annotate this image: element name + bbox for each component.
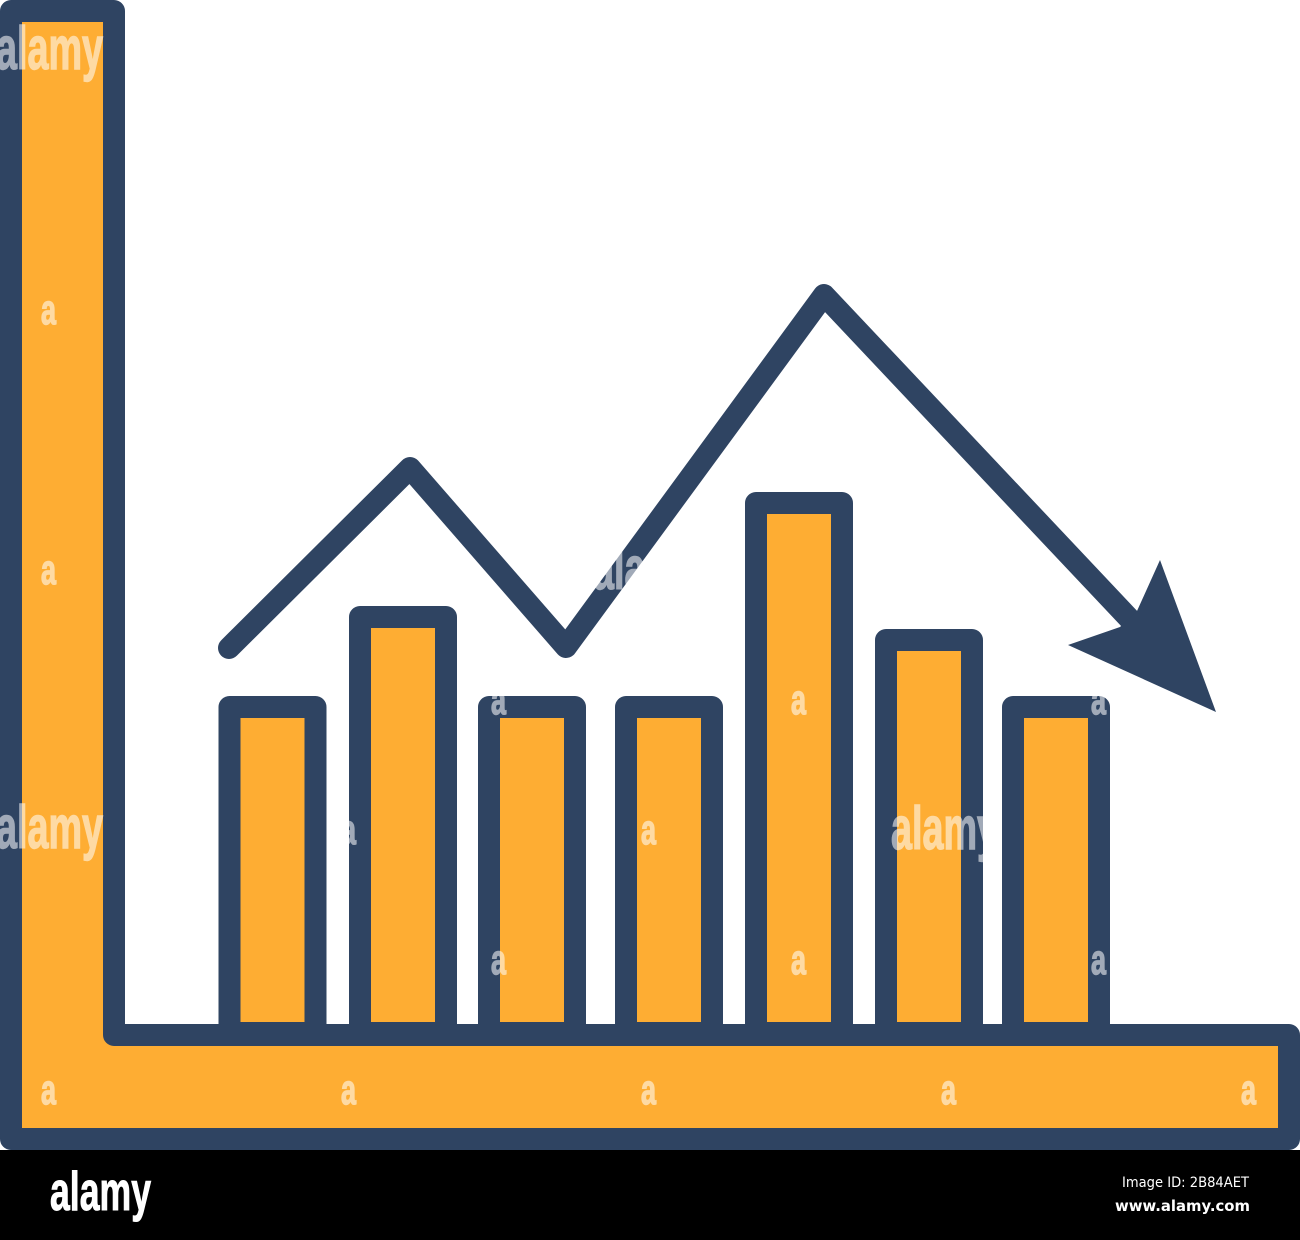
watermark fragments: a xyxy=(791,936,806,983)
watermark fragments: a xyxy=(941,1066,956,1113)
footer bar xyxy=(0,1150,1300,1240)
watermark fragments: a xyxy=(491,936,506,983)
watermark fragments: alamy xyxy=(593,535,700,602)
watermark fragments: alamy xyxy=(891,795,998,862)
bar 2 xyxy=(360,617,446,1033)
watermark fragments: a xyxy=(1091,936,1106,983)
watermark fragments: a xyxy=(791,676,806,723)
watermark fragments: a xyxy=(491,676,506,723)
watermark fragments: a xyxy=(1091,676,1106,723)
bar 3 xyxy=(489,707,575,1033)
url: www.alamy.com xyxy=(1115,1197,1250,1215)
trend line xyxy=(229,295,1140,648)
watermark fragments: alamy xyxy=(0,794,103,861)
watermark fragments: a xyxy=(41,546,56,593)
watermark fragments: a xyxy=(641,806,656,853)
watermark fragments: a xyxy=(341,1066,356,1113)
watermark fragments: alamy xyxy=(0,15,103,82)
bar 7 xyxy=(1013,707,1099,1033)
bar 5 xyxy=(756,503,842,1033)
watermark fragments: a xyxy=(41,1066,56,1113)
watermark fragments: a xyxy=(1241,1066,1256,1113)
watermark fragments: a xyxy=(41,286,56,333)
watermark fragments: a xyxy=(641,1066,656,1113)
watermark fragments: a xyxy=(341,806,356,853)
bar 4 xyxy=(626,707,712,1033)
alamy logo: alamy xyxy=(50,1160,151,1222)
bar 1 xyxy=(230,707,316,1033)
bar 6 xyxy=(886,640,972,1033)
image id: Image ID: 2B84AET xyxy=(1122,1175,1249,1191)
arrow head xyxy=(1068,560,1216,712)
